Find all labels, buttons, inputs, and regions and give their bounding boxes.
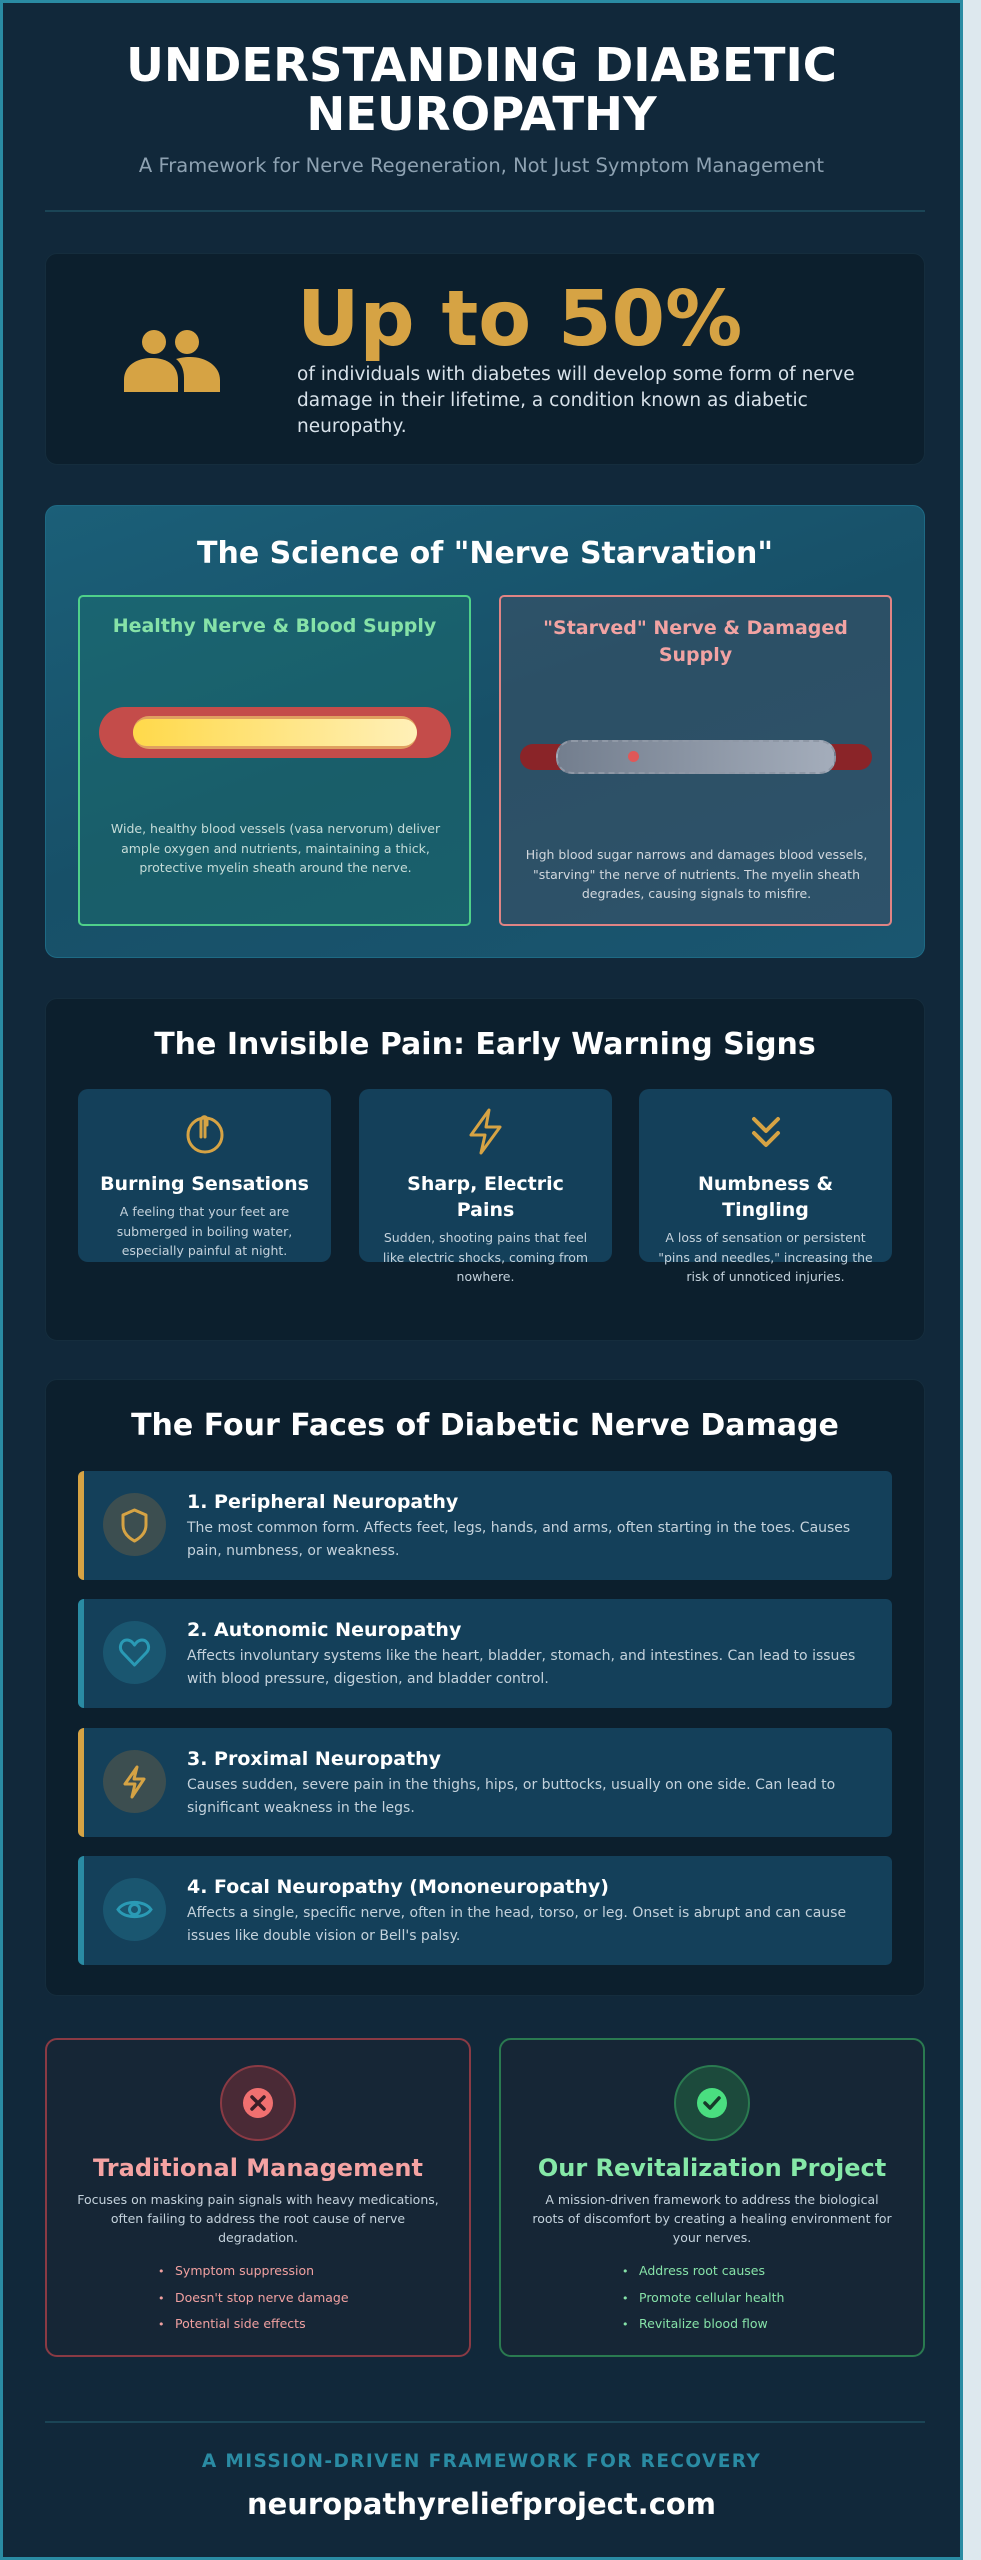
panel: traditional management: Traditional Management	[93, 2154, 423, 2182]
panel: traditional management	[45, 2038, 471, 2357]
card: burning	[78, 1089, 331, 1262]
panel: traditional management: Symptom suppression	[175, 2263, 314, 2278]
panel: revitalization project: Our Revitalization Project	[538, 2154, 886, 2182]
subtitle: A Framework for Nerve Regeneration, Not Just Symptom Management	[139, 154, 824, 177]
panel: science of nerve starvation	[45, 505, 925, 958]
item: focal	[78, 1856, 892, 1965]
stat description: of individuals with diabetes will develop some form of nerve damage in their lifetime, a condition known as diabetic neuropathy.	[297, 364, 855, 437]
item: focal: 4. Focal Neuropathy (Mononeuropathy)	[187, 1876, 609, 1898]
title	[126, 38, 837, 141]
item: focal: Affects a single, specific nerve, often in the head, torso, or leg. Onset is abrupt and can cause issues like double vision or Bell's palsy.	[187, 1905, 846, 1944]
card: numbness: Tingling	[722, 1199, 809, 1221]
card: burning: A feeling that your feet are submerged in boiling water, especially painful at night.	[117, 1204, 292, 1258]
item: peripheral: 1. Peripheral Neuropathy	[187, 1491, 458, 1513]
icon: people	[124, 330, 220, 392]
title: NEUROPATHY	[306, 87, 657, 141]
panel: revitalization project	[499, 2038, 925, 2357]
item: peripheral: The most common form. Affects feet, legs, hands, and arms, often starting in the toes. Causes pain, numbness, or weakness.	[187, 1520, 850, 1559]
panel: revitalization project: A mission-driven framework to address the biological roots of discomfort by creating a healing environment for your nerves.	[532, 2192, 892, 2245]
card: electric: Pains	[457, 1199, 514, 1221]
panel: traditional management: Focuses on masking pain signals with heavy medications, often failing to address the root cause of nerve degradation.	[77, 2192, 439, 2245]
card: burning: Burning Sensations	[100, 1173, 309, 1195]
item: proximal: 3. Proximal Neuropathy	[187, 1748, 441, 1770]
sub-panel: starved: Supply	[659, 644, 732, 666]
icon: check circle	[674, 2065, 750, 2141]
footer url: neuropathyreliefproject.com	[247, 2487, 716, 2521]
item: proximal: Causes sudden, severe pain in the thighs, hips, or buttocks, usually on one side. Can lead to significant weakness in the legs.	[187, 1777, 835, 1816]
panel: traditional management: Doesn't stop nerve damage	[175, 2290, 349, 2304]
panel: traditional management: Potential side effects	[175, 2316, 306, 2331]
sub-panel: starved	[499, 595, 892, 926]
item: peripheral	[78, 1471, 892, 1580]
footer tagline: A MISSION-DRIVEN FRAMEWORK FOR RECOVERY	[202, 2451, 761, 2472]
panel: revitalization project: Promote cellular health	[639, 2290, 784, 2304]
card: electric: Sudden, shooting pains that feel like electric shocks, coming from nowhere.	[383, 1230, 588, 1284]
item: proximal	[78, 1728, 892, 1837]
sub-panel: healthy	[78, 595, 471, 926]
panel: revitalization project: Revitalize blood flow	[639, 2316, 768, 2331]
icon: damaged vessel	[520, 744, 872, 770]
item: autonomic: 2. Autonomic Neuropathy	[187, 1619, 461, 1641]
card: electric	[359, 1089, 612, 1262]
item: autonomic: Affects involuntary systems like the heart, bladder, stomach, and intestines. Can lead to issues with blood pressure, digestion, and bladder control.	[187, 1648, 855, 1687]
card: electric: Sharp, Electric	[407, 1173, 564, 1195]
sub-panel: healthy: Healthy Nerve & Blood Supply	[113, 615, 436, 637]
icon: x circle	[220, 2065, 296, 2141]
icon: healthy vessel	[99, 707, 451, 758]
sub-panel: healthy: Wide, healthy blood vessels (vasa nervorum) deliver ample oxygen and nutrients, maintaining a thick, protective myelin sheath around the nerve.	[111, 821, 440, 875]
panel: revitalization project: Address root causes	[639, 2263, 765, 2278]
card: numbness	[639, 1089, 892, 1262]
card: numbness: Numbness &	[698, 1173, 833, 1195]
sub-panel: starved: "Starved" Nerve & Damaged	[543, 617, 848, 639]
heading: The Science of "Nerve Starvation"	[197, 536, 773, 571]
heading: The Four Faces of Diabetic Nerve Damage	[131, 1408, 839, 1443]
panel: statistic	[45, 253, 925, 465]
card: numbness: A loss of sensation or persistent "pins and needles," increasing the risk of unnoticed injuries.	[658, 1230, 873, 1284]
stat number: Up to 50%	[297, 275, 742, 364]
panel: four faces	[45, 1379, 925, 1996]
heading: The Invisible Pain: Early Warning Signs	[154, 1027, 816, 1062]
title: UNDERSTANDING DIABETIC	[126, 38, 837, 92]
item: autonomic	[78, 1599, 892, 1708]
sub-panel: starved: High blood sugar narrows and damages blood vessels, "starving" the nerve of nutrients. The myelin sheath degrades, causing signals to misfire.	[526, 847, 867, 901]
panel: early warning signs	[45, 998, 925, 1341]
